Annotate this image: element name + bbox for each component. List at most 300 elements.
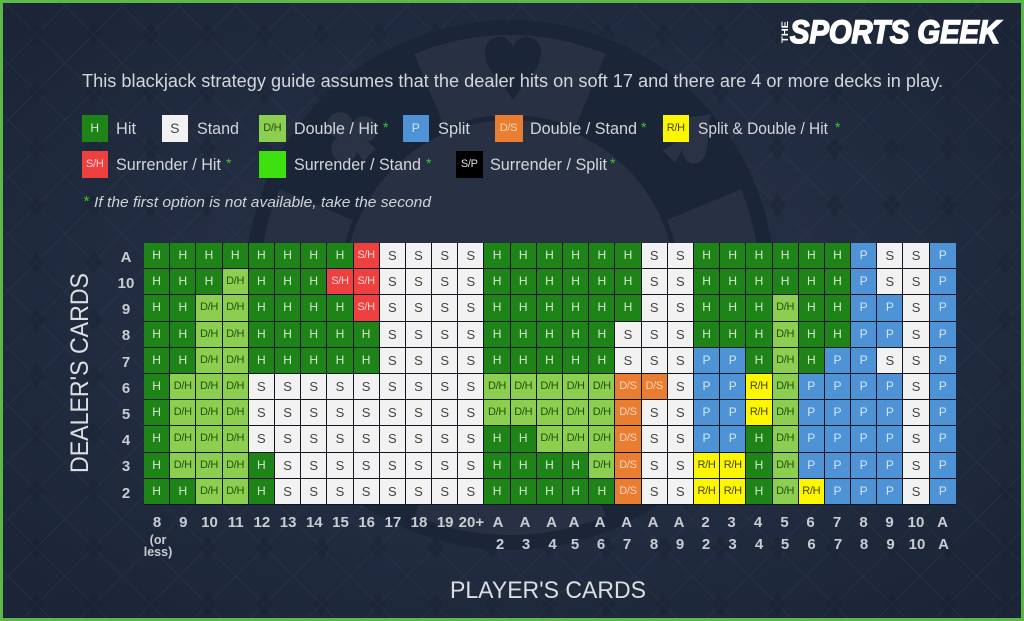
player card labels: second row: 10 <box>909 536 925 553</box>
row: dealer A: H <box>571 248 580 262</box>
row: dealer A: H <box>833 248 842 262</box>
row: dealer A: S <box>414 248 423 263</box>
strategy table <box>144 243 956 505</box>
row: dealer 6: S <box>362 379 370 394</box>
row: dealer 4: S <box>336 431 344 446</box>
row: dealer 10 <box>144 269 956 294</box>
row: dealer 5: P <box>939 405 947 419</box>
row: dealer A: H <box>336 248 344 262</box>
row: dealer 8: D/H <box>226 328 244 340</box>
row: dealer 7 <box>144 348 956 373</box>
dealer card labels: 5 <box>122 406 130 423</box>
row: dealer 6: H <box>152 379 161 393</box>
row: dealer 10: S <box>414 274 423 289</box>
player card labels: second row: 8 <box>860 536 868 553</box>
row: dealer 5: D/H <box>514 406 532 418</box>
row: dealer 2: P <box>886 484 894 498</box>
row: dealer 8: S <box>624 327 632 342</box>
dealer card labels: 10 <box>118 275 134 292</box>
row: dealer 4: D/H <box>174 432 192 444</box>
row: dealer 8: H <box>178 327 187 341</box>
row: dealer A: H <box>807 248 816 262</box>
row: dealer 2: P <box>833 484 841 498</box>
row: dealer 9: D/H <box>776 301 794 313</box>
player card labels: second row: 9 <box>886 536 895 553</box>
row: dealer 7: S <box>650 353 658 368</box>
player card labels: second row: 4 <box>755 536 764 553</box>
row: dealer 10: H <box>728 274 737 288</box>
row: dealer 5: S <box>414 405 423 420</box>
row: dealer 2 <box>144 479 956 504</box>
row: dealer 4: D/H <box>593 432 611 444</box>
row: dealer 6: S <box>336 379 344 394</box>
row: dealer 7: P <box>729 353 737 367</box>
row: dealer 10: H <box>807 274 816 288</box>
row: dealer 5: S <box>336 405 344 420</box>
swatch: split and double / hit: R/H <box>667 122 685 134</box>
row: dealer 6: D/H <box>200 380 218 392</box>
row: dealer 2: D/H <box>776 485 794 497</box>
legend swatches <box>82 115 689 178</box>
row: dealer 2: H <box>178 484 187 498</box>
row: dealer 6: S <box>257 379 266 394</box>
dealer card labels: 2 <box>122 485 130 502</box>
row: dealer 9: H <box>571 300 580 314</box>
row: dealer 4: D/H <box>200 432 218 444</box>
row: dealer A: H <box>205 248 213 262</box>
logo: The Sports Geek: THE <box>780 21 790 43</box>
row: dealer 2: H <box>519 484 528 498</box>
row: dealer 7: P <box>833 353 841 367</box>
row: dealer 3: P <box>939 458 947 472</box>
row: dealer 7: S <box>886 353 894 368</box>
row: dealer 10: H <box>545 274 554 288</box>
row: dealer 6: D/S <box>645 380 663 392</box>
icon: spade <box>650 95 730 175</box>
row: dealer A: P <box>860 248 868 262</box>
row: dealer 9: S <box>676 300 685 315</box>
player card labels: first row: A <box>621 514 632 531</box>
row: dealer 6: D/H <box>567 380 585 392</box>
row: dealer 7: H <box>545 353 554 367</box>
row: dealer A: H <box>493 248 501 262</box>
row: dealer 5: S <box>912 405 920 420</box>
row: dealer 4: S <box>676 431 685 446</box>
row: dealer 4: S <box>283 431 292 446</box>
row: dealer 7: H <box>152 353 161 367</box>
player card labels: first row: 3 <box>727 514 736 531</box>
swatch: split and double / hit <box>662 115 689 142</box>
row: dealer 6: P <box>729 379 737 393</box>
row: dealer A: S/H <box>357 249 375 261</box>
row: dealer 10: H <box>755 274 763 288</box>
row: dealer 7: H <box>257 353 266 367</box>
row: dealer 2: P <box>860 484 868 498</box>
intro sentence: This blackjack strategy guide assumes that the dealer hits on soft 17 and there are 4 or more decks in play. <box>82 71 943 91</box>
player card labels: second row: 2 <box>496 536 504 553</box>
row: dealer 3: H <box>545 458 554 472</box>
row: dealer 8: H <box>362 327 370 341</box>
player card labels: first row: 7 <box>833 514 841 531</box>
row: dealer 10: H <box>283 274 292 288</box>
row: dealer 9: H <box>336 300 344 314</box>
row: dealer 10: H <box>205 274 213 288</box>
row: dealer 2: R/H <box>724 485 742 497</box>
row: dealer 7: D/H <box>776 354 794 366</box>
row: dealer 3: H <box>152 458 161 472</box>
row: dealer 5: S <box>388 405 397 420</box>
row: dealer 6: S <box>466 379 475 394</box>
player card labels: second row: 5 <box>781 536 789 553</box>
row: dealer 10: H <box>493 274 501 288</box>
row: dealer 2: S <box>283 484 292 499</box>
row: dealer 3: S <box>414 458 423 473</box>
icon: heart <box>485 37 541 100</box>
row: dealer 2: S <box>414 484 423 499</box>
dealer card labels <box>118 249 134 502</box>
row: dealer 8: H <box>519 327 528 341</box>
legend labels: Split <box>438 119 470 138</box>
row: dealer 9: P <box>939 300 947 314</box>
row: dealer 9: H <box>624 300 632 314</box>
player card labels: first row: 17 <box>385 514 401 531</box>
player card labels: first row: 14 <box>306 514 323 531</box>
swatch: surrender / split: S/P <box>461 158 478 170</box>
row: dealer 5: S <box>283 405 292 420</box>
row: dealer A: H <box>309 248 318 262</box>
player card labels: first row: 4 <box>754 514 763 531</box>
row: dealer 7: H <box>493 353 501 367</box>
row: dealer 3: H <box>493 458 501 472</box>
player card labels: first row: A <box>493 514 504 531</box>
row: dealer 7: P <box>860 353 868 367</box>
player card labels: first row: 6 <box>806 514 815 531</box>
row: dealer A: H <box>283 248 292 262</box>
legend asterisks: * <box>383 119 389 135</box>
row: dealer 4: H <box>755 431 763 445</box>
row: dealer 9: S <box>440 300 449 315</box>
row: dealer 8: H <box>336 327 344 341</box>
row: dealer 6: P <box>833 379 841 393</box>
row: dealer 6: S <box>388 379 397 394</box>
row: dealer 6: D/H <box>593 380 611 392</box>
row: dealer 9: H <box>519 300 528 314</box>
row: dealer 10: H <box>624 274 632 288</box>
player card labels: first row: A <box>520 514 531 531</box>
row: dealer 3: S <box>309 458 318 473</box>
player card labels: first row: 15 <box>332 514 349 531</box>
row: dealer 9: H <box>309 300 318 314</box>
footnote: If the first option is not available, take the second <box>94 194 432 211</box>
row: dealer 8: H <box>545 327 554 341</box>
row: dealer 6: P <box>807 379 815 393</box>
row: dealer 4: P <box>729 431 737 445</box>
legend labels <box>116 119 828 174</box>
player card labels: second row: 9 <box>676 536 684 553</box>
row: dealer 5: D/S <box>619 406 637 418</box>
row: dealer 2: S <box>466 484 475 499</box>
legend labels: Split & Double / Hit <box>698 119 828 138</box>
row: dealer 3: S <box>362 458 370 473</box>
row: dealer 9: H <box>178 300 187 314</box>
row: dealer 8: D/H <box>776 328 794 340</box>
swatch: surrender / hit <box>82 151 108 178</box>
player card labels: first row: 10 <box>201 514 218 531</box>
row: dealer 7: S <box>676 353 685 368</box>
row: dealer 4: S <box>466 431 475 446</box>
row: dealer 6: S <box>440 379 449 394</box>
row: dealer 3: S <box>650 458 658 473</box>
dealer card labels: 3 <box>122 458 130 475</box>
row: dealer 4: H <box>493 431 501 445</box>
row: dealer A: H <box>702 248 711 262</box>
row: dealer 6: R/H <box>750 380 768 392</box>
row: dealer 4: S <box>912 431 920 446</box>
row: dealer 10: S <box>388 274 397 289</box>
row: dealer 4: D/H <box>226 432 244 444</box>
row: dealer 10: H <box>178 274 187 288</box>
row: dealer 3: P <box>860 458 868 472</box>
player card labels: second row: 6 <box>597 536 605 553</box>
row: dealer 3: S <box>440 458 449 473</box>
row: dealer 8: P <box>886 327 894 341</box>
player card labels: first row: A <box>569 514 580 531</box>
swatch: surrender / hit: S/H <box>86 158 103 170</box>
swatch: double / hit <box>259 115 286 142</box>
row: dealer A: H <box>597 248 606 262</box>
row: dealer 3: D/S <box>619 459 637 471</box>
row: dealer 8: H <box>283 327 292 341</box>
row: dealer 6: P <box>860 379 868 393</box>
row: dealer 6: P <box>703 379 711 393</box>
row: dealer 5: H <box>152 405 161 419</box>
dealer card labels: 8 <box>122 327 130 344</box>
row: dealer 9: S/H <box>357 301 375 313</box>
row: dealer 2: R/H <box>802 485 820 497</box>
row: dealer 3: P <box>833 458 841 472</box>
row: dealer 2: D/S <box>619 485 637 497</box>
player card labels: first row: 10 <box>908 514 924 531</box>
row: dealer 8: H <box>702 327 711 341</box>
player card labels: first row: A <box>648 514 659 531</box>
row: dealer 4 <box>144 426 956 452</box>
row: dealer 5: D/H <box>226 406 244 418</box>
player card labels: first row: 8 <box>153 514 161 531</box>
row: dealer 2: S <box>309 484 318 499</box>
note: or less <box>144 533 172 559</box>
player card labels: first row: A <box>674 514 685 531</box>
row: dealer 3: S <box>466 458 475 473</box>
row: dealer 8: H <box>493 327 501 341</box>
row: dealer 6: D/H <box>488 380 506 392</box>
swatch: hit: H <box>90 121 99 135</box>
player card labels: second row: 8 <box>650 536 658 553</box>
row: dealer 10: H <box>597 274 606 288</box>
row: dealer 5: D/H <box>776 406 794 418</box>
row: dealer 10: S <box>912 274 920 289</box>
row: dealer 3: R/H <box>724 459 742 471</box>
row: dealer 9: D/H <box>200 301 218 313</box>
row: dealer 5: S <box>676 405 685 420</box>
row: dealer 8: P <box>860 327 868 341</box>
row: dealer 9: S <box>912 300 920 315</box>
legend labels: Stand <box>197 119 239 138</box>
row: dealer 4: D/S <box>619 432 637 444</box>
player card labels: second row: 6 <box>807 536 816 553</box>
row: dealer 7: S <box>912 353 920 368</box>
row: dealer 4: P <box>886 431 894 445</box>
row: dealer 2: H <box>493 484 501 498</box>
swatch: hit <box>82 115 108 142</box>
player card labels: second row: A <box>938 536 949 553</box>
player card labels: first row: 13 <box>280 514 296 531</box>
axis title: player's cards: PLAYER'S CARDS <box>450 577 646 604</box>
row: dealer 8: S <box>466 327 475 342</box>
row: dealer 3: P <box>886 458 894 472</box>
row: dealer 8: H <box>728 327 737 341</box>
row: dealer 7: S <box>624 353 632 368</box>
row: dealer 10: D/H <box>226 275 244 287</box>
row: dealer A: S <box>650 248 658 263</box>
row: dealer 3: D/H <box>776 459 794 471</box>
row: dealer 5: P <box>860 405 868 419</box>
legend labels: Double / Hit <box>294 119 378 138</box>
player card labels: second row: 5 <box>571 536 579 553</box>
row: dealer 8: H <box>597 327 606 341</box>
row: dealer 8: H <box>152 327 161 341</box>
row: dealer 2: H <box>545 484 554 498</box>
player card labels: second row: 7 <box>623 536 631 553</box>
row: dealer 6: S <box>912 379 920 394</box>
row: dealer 9: H <box>545 300 554 314</box>
row: dealer 2: S <box>336 484 344 499</box>
row: dealer 5: P <box>807 405 815 419</box>
row: dealer A: S <box>912 248 920 263</box>
row: dealer A: P <box>939 248 947 262</box>
row: dealer 10: P <box>860 274 868 288</box>
row: dealer 6: S <box>309 379 318 394</box>
row: dealer 4: P <box>833 431 841 445</box>
row: dealer 10: H <box>152 274 161 288</box>
row: dealer 9: D/H <box>226 301 244 313</box>
row: dealer 7: D/H <box>200 354 218 366</box>
row: dealer 4: S <box>388 431 397 446</box>
row: dealer 3: R/H <box>698 459 716 471</box>
row: dealer 3: P <box>807 458 815 472</box>
row: dealer A: S <box>886 248 894 263</box>
row: dealer 4: S <box>650 431 658 446</box>
row: dealer 2: S <box>912 484 920 499</box>
row: dealer 8: H <box>571 327 580 341</box>
legend labels: Hit <box>116 119 136 138</box>
row: dealer 2: D/H <box>226 485 244 497</box>
row: dealer 7: S <box>414 353 423 368</box>
row: dealer 8: S <box>440 327 449 342</box>
row: dealer 10: H <box>571 274 580 288</box>
row: dealer 10: H <box>519 274 528 288</box>
row: dealer 3: H <box>571 458 580 472</box>
row: dealer 8: S <box>414 327 423 342</box>
row: dealer 7: H <box>807 353 816 367</box>
player card labels: second row: 3 <box>728 536 737 553</box>
note: or less: (or <box>150 533 166 547</box>
player card labels: first row: 12 <box>254 514 270 531</box>
row: dealer 5: P <box>833 405 841 419</box>
row: dealer 6 <box>144 374 956 399</box>
row: dealer 2: H <box>755 484 763 498</box>
row: dealer 6: D/H <box>226 380 244 392</box>
swatch: surrender / split <box>456 151 482 178</box>
row: dealer A: S <box>440 248 449 263</box>
row: dealer 10: S <box>650 274 658 289</box>
player card labels: first row <box>153 514 948 531</box>
row: dealer 4: S <box>440 431 449 446</box>
row: dealer 10: S <box>466 274 475 289</box>
row: dealer 6: D/S <box>619 380 637 392</box>
legend labels: Surrender / Split <box>490 155 607 174</box>
icon: club <box>312 97 389 174</box>
row: dealer 6: D/H <box>540 380 558 392</box>
row: dealer 5: S <box>650 405 658 420</box>
row: dealer 7: H <box>519 353 528 367</box>
row: dealer 4: S <box>309 431 318 446</box>
row: dealer 9: S <box>388 300 397 315</box>
row: dealer 9: P <box>860 300 868 314</box>
row: dealer A: H <box>728 248 737 262</box>
row: dealer 9: H <box>833 300 842 314</box>
row: dealer 7: S <box>440 353 449 368</box>
player card labels: first row: A <box>546 514 557 531</box>
player card labels: first row: 8 <box>859 514 868 531</box>
row: dealer 2: H <box>597 484 606 498</box>
player card labels: first row: 5 <box>780 514 789 531</box>
row: dealer 2: H <box>257 484 266 498</box>
row: dealer 6: S <box>283 379 292 394</box>
swatch: split: P <box>412 121 420 135</box>
row: dealer 10: H <box>833 274 842 288</box>
row: dealer 7: H <box>755 353 763 367</box>
row: dealer 3: S <box>388 458 397 473</box>
row: dealer 2: S <box>676 484 685 499</box>
row: dealer A: S <box>676 248 685 263</box>
player card labels: first row: A <box>595 514 606 531</box>
legend labels: Double / Stand <box>530 119 637 138</box>
dealer card labels: 9 <box>122 301 130 318</box>
note: or less: less) <box>144 545 172 559</box>
player card labels: second row <box>496 536 949 553</box>
row: dealer 5: S <box>440 405 449 420</box>
row: dealer 7: S <box>388 353 397 368</box>
row: dealer A: H <box>781 248 789 262</box>
row: dealer 6: D/H <box>776 380 794 392</box>
row: dealer 8: S <box>388 327 397 342</box>
row: dealer 5: R/H <box>750 406 768 418</box>
swatch: stand <box>162 115 188 142</box>
row: dealer 7: H <box>571 353 580 367</box>
row: dealer 2: P <box>939 484 947 498</box>
row: dealer 5: P <box>886 405 894 419</box>
row: dealer A: H <box>624 248 632 262</box>
row: dealer 3: H <box>755 458 763 472</box>
legend asterisks: * <box>610 155 616 171</box>
player card labels: first row: 2 <box>701 514 710 531</box>
row: dealer 9: S <box>414 300 423 315</box>
row: dealer 5: S <box>466 405 475 420</box>
row: dealer 7: P <box>939 353 947 367</box>
row: dealer 9: H <box>283 300 292 314</box>
row: dealer 5: D/H <box>540 406 558 418</box>
row: dealer A: H <box>231 248 239 262</box>
